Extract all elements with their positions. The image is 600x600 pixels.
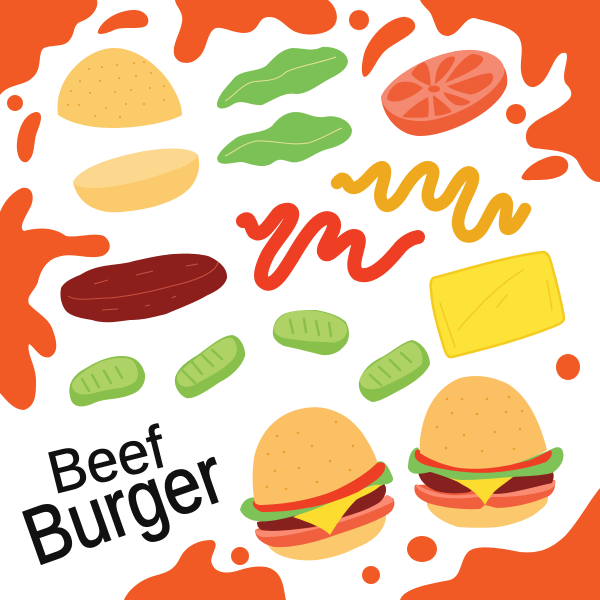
splash: top centre — [174, 0, 337, 63]
ketchup squiggle — [243, 210, 418, 284]
lettuce leaves — [217, 47, 352, 166]
splash: bottom centre — [124, 540, 286, 600]
top bun — [253, 407, 377, 505]
splash: top right — [420, 0, 600, 182]
splash: top left — [0, 0, 97, 95]
splash: bottom right — [400, 488, 600, 600]
ketchup — [253, 463, 385, 512]
cheese — [293, 482, 384, 535]
title: Beef: Beef — [41, 413, 172, 507]
tomato — [414, 480, 555, 509]
cheese slice — [431, 252, 564, 357]
bottom bun — [73, 149, 199, 212]
top bun — [420, 376, 547, 469]
splash: left — [0, 188, 110, 410]
burger left — [240, 407, 394, 560]
tomato — [255, 498, 394, 547]
pickles — [69, 310, 430, 406]
patty — [257, 484, 386, 531]
tomato slice — [381, 50, 507, 136]
ketchup — [415, 449, 552, 473]
top bun — [58, 48, 182, 128]
title: Burger: Burger — [12, 430, 235, 582]
lettuce — [408, 447, 563, 480]
cheese — [420, 468, 513, 505]
bottom bun — [427, 485, 548, 528]
burger right — [408, 376, 563, 528]
lettuce — [240, 461, 393, 521]
beef patty — [60, 254, 227, 322]
patty — [418, 470, 554, 494]
mustard squiggle — [337, 167, 525, 237]
bottom bun — [267, 505, 386, 560]
